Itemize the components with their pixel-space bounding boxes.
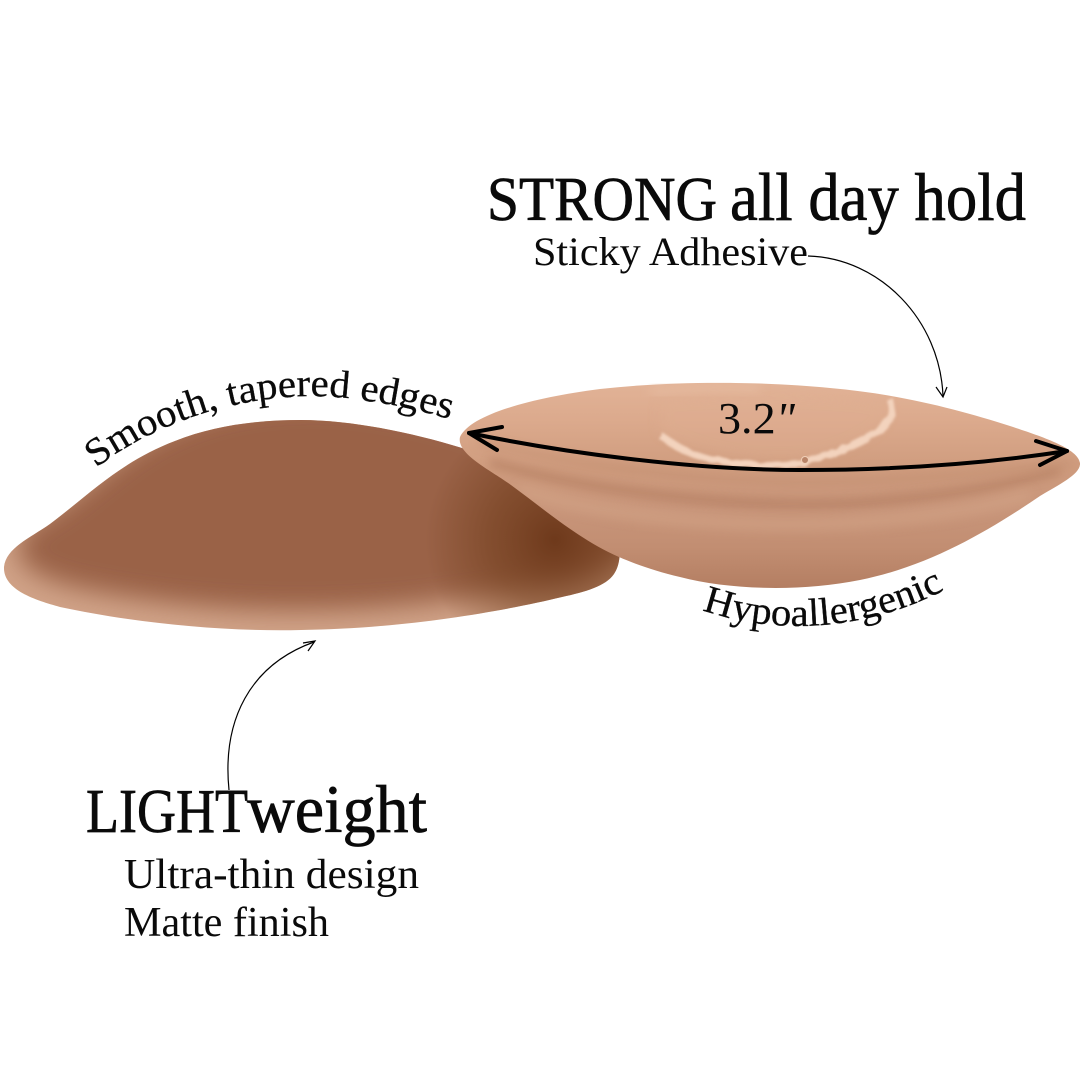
curved label: hypoallergenic: Hypoallergenic [702, 574, 944, 632]
feature text: ultra-thin design: Ultra-thin design [124, 852, 419, 898]
product: left cover, matte front [4, 420, 620, 630]
product: right cover, adhesive side [460, 383, 1080, 588]
dimension arrow: 3.2 inch width [469, 427, 1067, 470]
heading: strong hold: STRONG [487, 166, 717, 234]
highlight upper rim [651, 388, 760, 392]
heading: strong hold: all day hold [730, 159, 1026, 235]
dimension label: 3.2" [718, 394, 796, 443]
arrow: lightweight callout [228, 641, 315, 790]
navel dimple [802, 456, 808, 464]
subheading: sticky adhesive: Sticky Adhesive [533, 229, 808, 274]
heading: strong hold [487, 159, 1026, 235]
arrow: adhesive callout [808, 256, 947, 397]
highlight ring on adhesive [661, 400, 892, 466]
heading: lightweight: LIGHT [86, 778, 248, 846]
infographic canvas [4, 172, 1080, 936]
heading: lightweight [86, 771, 427, 847]
feature text: matte finish: Matte finish [124, 900, 329, 946]
lighter basin inside adhesive ring [660, 394, 889, 461]
curved label: smooth tapered edges: Smooth, tapered edges [86, 370, 452, 466]
heading: lightweight: weight [247, 771, 427, 847]
